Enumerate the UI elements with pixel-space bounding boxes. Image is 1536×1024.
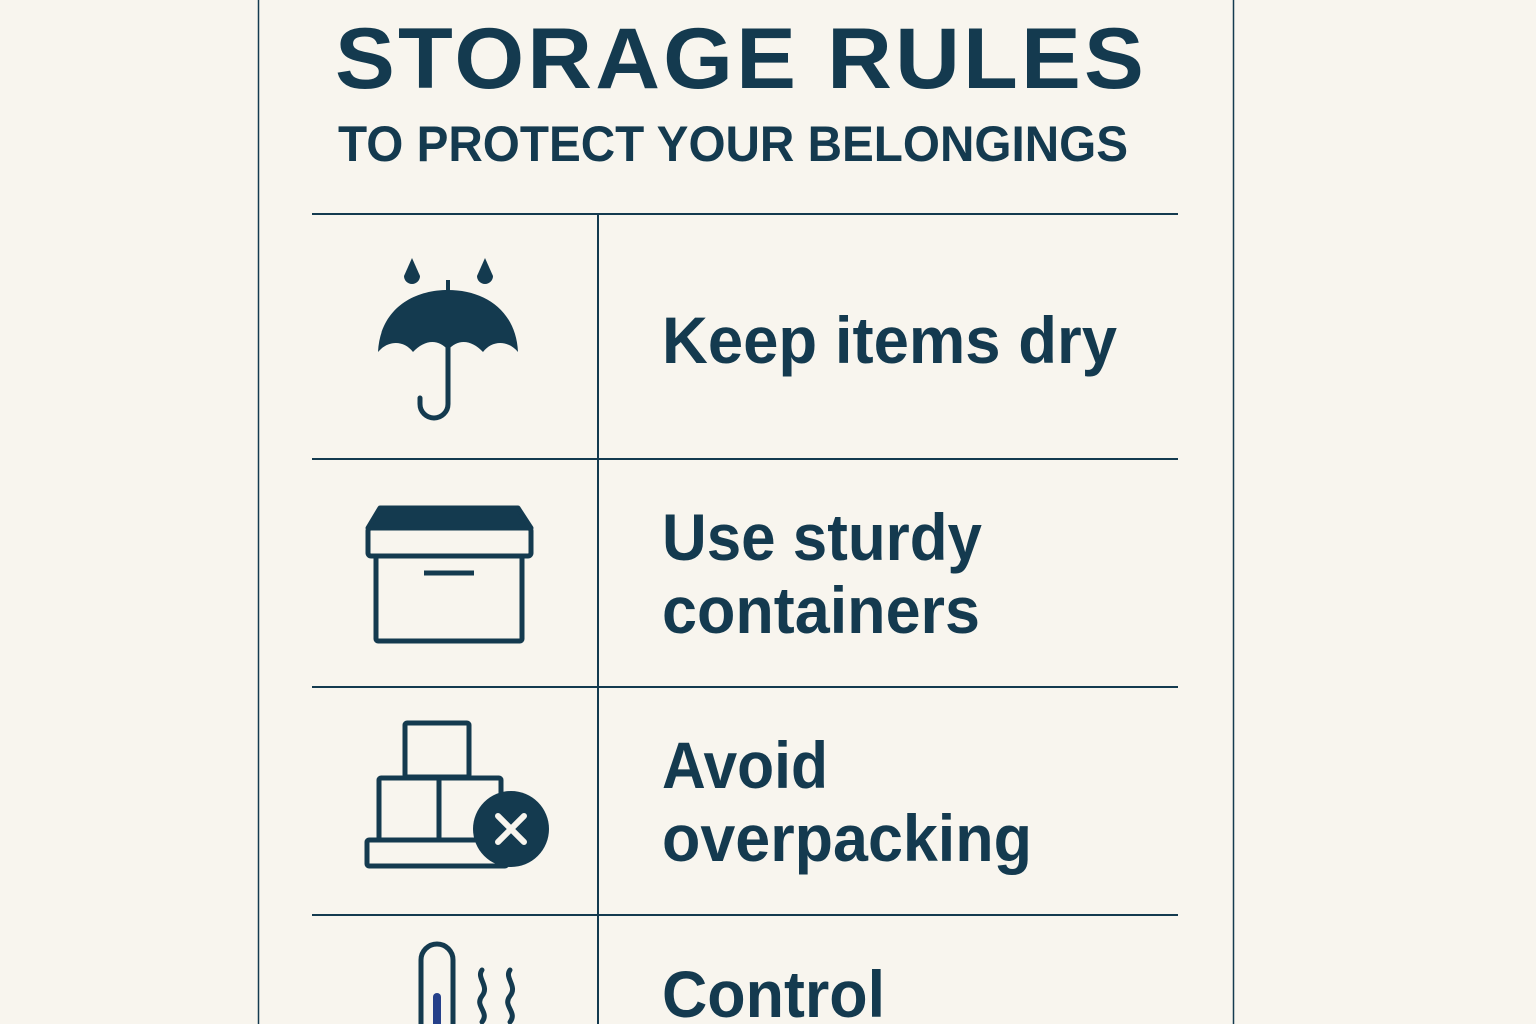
title: STORAGE RULES [335, 11, 1147, 107]
icon: stacked boxes with x [367, 723, 549, 867]
text: use sturdy containers [662, 500, 982, 647]
text: avoid overpacking: Avoid [662, 728, 828, 802]
icon: thermometer and humidity [421, 944, 513, 1024]
subtitle: TO PROTECT YOUR BELONGINGS [338, 116, 1128, 172]
text: keep items dry: Keep items dry [662, 303, 1117, 377]
text: use sturdy containers: Use sturdy [662, 500, 982, 574]
text: use sturdy containers: containers [662, 573, 980, 647]
text: avoid overpacking: overpacking [662, 801, 1032, 875]
icon: umbrella [378, 258, 518, 418]
icon: box [368, 508, 531, 641]
text: avoid overpacking [662, 728, 1032, 875]
